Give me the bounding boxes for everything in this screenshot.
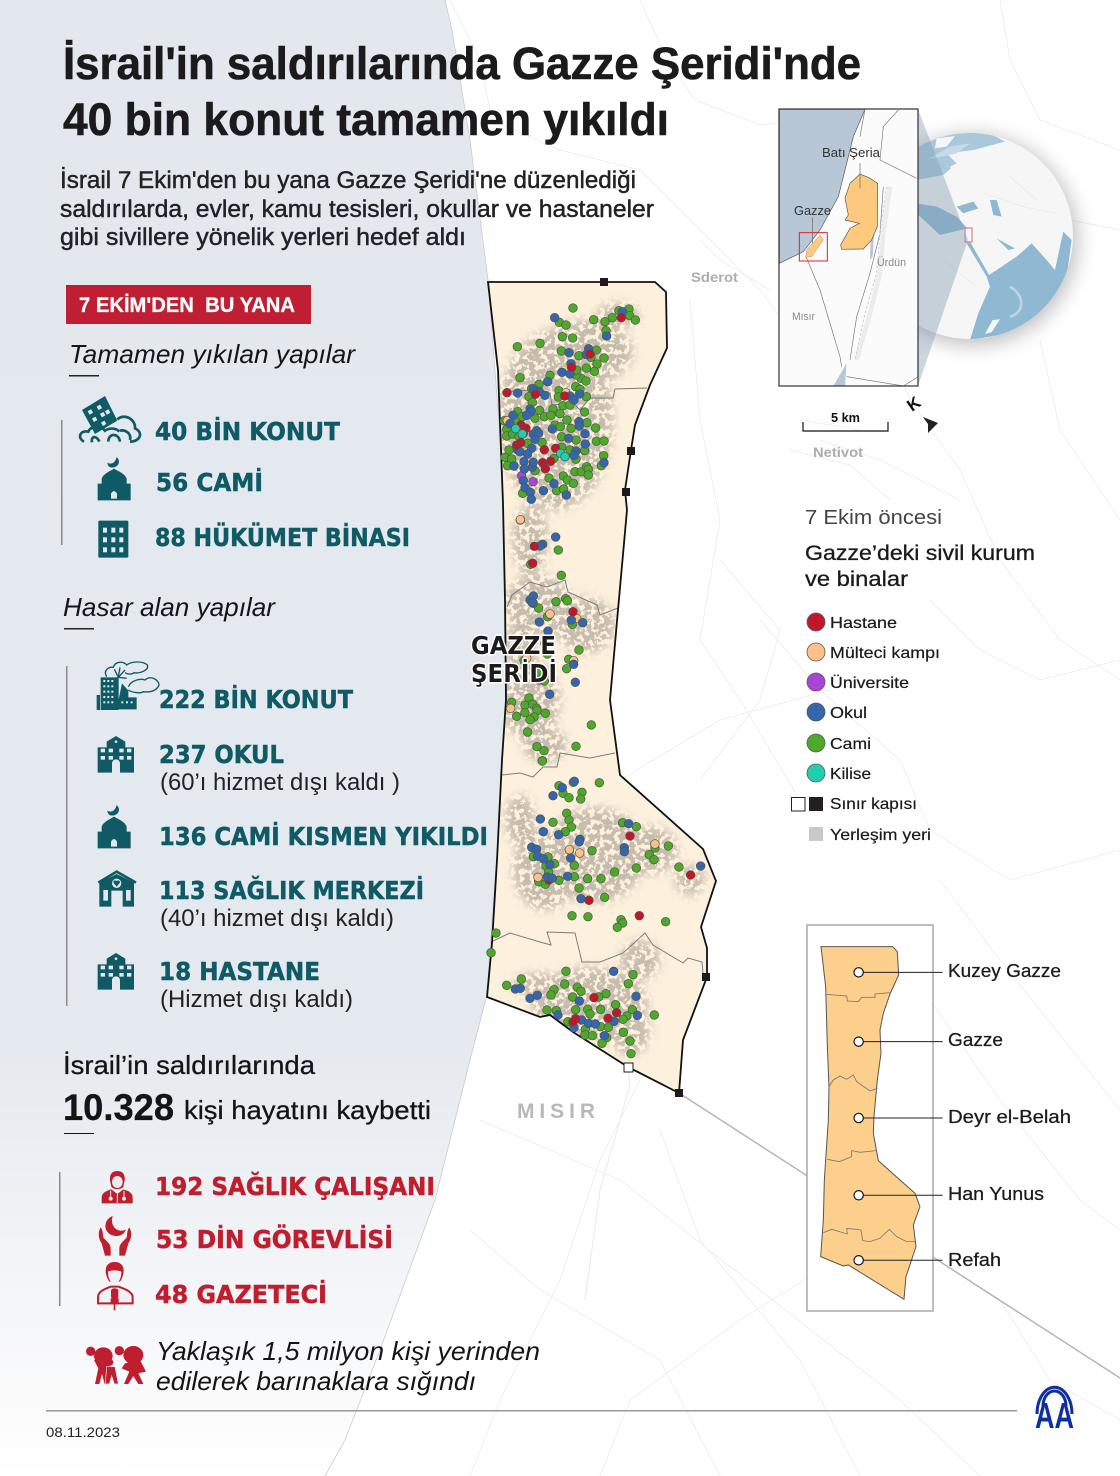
- settlements: [497, 303, 705, 1055]
- legend heading: ve binalar: [805, 568, 908, 591]
- left panel background: [0, 0, 510, 1476]
- icon: mosque: [98, 457, 131, 500]
- death toll text: kişi hayatını kaybetti: [184, 1095, 431, 1125]
- label: Gaza Strip: GAZZE: [471, 631, 556, 660]
- label: Egypt: MISIR: [517, 1100, 595, 1123]
- stat: 237 schools: 237 OKUL: [159, 740, 284, 769]
- legend labels: [830, 615, 940, 844]
- heading: damaged structures: Hasar alan yapılar: [63, 592, 276, 622]
- legend heading: 7 Ekim öncesi: [805, 507, 942, 529]
- scale bar: [803, 410, 888, 431]
- border crossings: [600, 278, 710, 1097]
- red banner: since 7 October: [66, 285, 311, 324]
- icon: collapsing building: [80, 396, 140, 442]
- gaza land: [487, 282, 716, 1093]
- legend labels: Mülteci kampı: [830, 645, 940, 662]
- locator rectangle: [799, 233, 827, 261]
- stat: 237 schools: (60’ı hizmet dışı kaldı ): [160, 769, 400, 796]
- zoom cone: [918, 109, 968, 386]
- land detail: [806, 109, 918, 386]
- stat: 222 thousand homes: 222 BİN KONUT: [159, 684, 353, 714]
- icon: health centre: [98, 872, 136, 907]
- legend labels: Sınır kapısı: [830, 796, 917, 813]
- icon: crescent in hands: [99, 1216, 131, 1256]
- globe: [918, 124, 1088, 356]
- gaza outline: [487, 282, 716, 1093]
- death toll text: [63, 1050, 431, 1134]
- district boundaries: [491, 388, 703, 973]
- stat: 237 schools: [159, 740, 400, 796]
- displacement note: [156, 1336, 540, 1396]
- icon: health worker: [102, 1171, 133, 1203]
- inset labels: Batı Şeria: [822, 145, 881, 160]
- Egypt border line: [679, 1093, 1120, 1378]
- stat: 88 government buildings: 88 HÜKÜMET BİNASI: [155, 522, 410, 552]
- stat: 192 health workers: 192 SAĞLIK ÇALIŞANI: [155, 1171, 435, 1201]
- legend labels: Hastane: [830, 615, 897, 632]
- west bank: [841, 174, 878, 249]
- sea: [779, 109, 865, 263]
- stat: 56 mosques: 56 CAMİ: [156, 467, 263, 497]
- stat: 18 hospitals: (Hizmet dışı kaldı): [160, 986, 353, 1013]
- logo: AA: [1035, 1387, 1074, 1436]
- legend: [792, 507, 1035, 844]
- death toll text: 10.328: [63, 1087, 174, 1128]
- district shape: [821, 947, 920, 1299]
- icon: mosque damaged: [98, 805, 131, 848]
- icon: hospital: [98, 953, 134, 990]
- globe marker: [965, 228, 972, 242]
- facility dots: central gaza: [506, 515, 596, 765]
- date: 08.11.2023: [46, 1424, 120, 1440]
- dead sea and red sea: [833, 227, 874, 386]
- inset location map: Ürdün: [877, 257, 906, 269]
- district inset map: [807, 925, 1071, 1311]
- coastline: [325, 0, 510, 1476]
- stat: 113 health centres: (40’ı hizmet dışı kaldı): [160, 905, 394, 932]
- stat: 18 hospitals: [159, 957, 353, 1013]
- facility dots: north gaza: [500, 304, 640, 524]
- title: İsrail'in saldırılarında Gazze Şeridi'nde: [63, 38, 861, 89]
- globe oceans: [917, 132, 1072, 340]
- globe shadow: [868, 136, 1076, 344]
- gaza: [806, 235, 823, 257]
- label: Sderot: Sderot: [691, 269, 738, 285]
- district labels: Gazze: [948, 1030, 1003, 1050]
- gaza strip map: [487, 282, 716, 1093]
- icon: journalist: [98, 1262, 133, 1310]
- stat: 53 religious officials: 53 DİN GÖREVLİSİ: [156, 1224, 393, 1254]
- displacement note: Yaklaşık 1,5 milyon kişi yerinden: [156, 1336, 540, 1366]
- red banner: since 7 October: 7 EKİM'DEN BU YANA: [79, 294, 295, 317]
- scale bar: 5 km: [831, 410, 860, 425]
- stat: 18 hospitals: 18 HASTANE: [159, 957, 320, 986]
- stat: 48 journalists: 48 GAZETECİ: [155, 1279, 327, 1309]
- district labels: Deyr el-Belah: [948, 1107, 1071, 1127]
- district labels: Han Yunus: [948, 1184, 1044, 1204]
- district labels: Refah: [948, 1250, 1001, 1270]
- displacement note: edilerek barınaklara sığındı: [156, 1366, 476, 1396]
- legend heading: [805, 507, 1035, 591]
- legend labels: Yerleşim yeri: [830, 827, 931, 844]
- inset location map: Mısır: [792, 311, 815, 323]
- label: Netivot: Netivot: [813, 444, 863, 460]
- north arrow: K: [903, 392, 925, 415]
- footer rule: [46, 1410, 1017, 1412]
- stat: 136 mosques partly destroyed: 136 CAMİ KISMEN YIKILDI: [159, 821, 488, 851]
- facility dots: south gaza: [487, 757, 705, 1058]
- north arrow: [903, 392, 938, 433]
- label: Gaza Strip: [471, 631, 557, 688]
- icon: government building: [98, 521, 128, 558]
- intro text: gibi sivillere yönelik yerleri hedef aldı: [60, 224, 466, 251]
- death toll text: İsrail’in saldırılarında: [63, 1050, 316, 1080]
- legend labels: Üniversite: [830, 674, 909, 692]
- icon: displaced family: [86, 1346, 146, 1384]
- intro text: saldırılarda, evler, kamu tesisleri, okullar ve hastaneler: [60, 196, 654, 223]
- inset location map: [779, 109, 918, 386]
- icon: school: [98, 736, 134, 773]
- label: Gaza Strip: ŞERİDİ: [471, 658, 557, 688]
- legend labels: Kilise: [830, 766, 871, 783]
- stat: 113 health centres: [159, 875, 424, 932]
- Egypt road near border: [585, 1067, 630, 1300]
- legend heading: Gazze’deki sivil kurum: [805, 542, 1035, 565]
- stat: 113 health centres: 113 SAĞLIK MERKEZİ: [159, 875, 424, 905]
- intro text: İsrail 7 Ekim'den bu yana Gazze Şeridi'ne düzenlediği: [60, 167, 636, 194]
- title: [63, 38, 861, 145]
- inset labels: [794, 145, 881, 218]
- legend labels: Cami: [830, 736, 871, 753]
- legend items: [792, 613, 825, 841]
- logo: AA: AA: [1035, 1395, 1074, 1436]
- district markers: [854, 968, 863, 1265]
- district lines: [823, 993, 915, 1242]
- intro text: [60, 167, 654, 251]
- stat: 40 thousand homes: 40 BİN KONUT: [155, 416, 340, 446]
- district labels: [948, 961, 1071, 1270]
- icon: damaged buildings with smoke: [97, 662, 159, 710]
- leader lines: [859, 972, 943, 1260]
- legend labels: Okul: [830, 705, 867, 722]
- district labels: Kuzey Gazze: [948, 961, 1061, 981]
- heading: completely destroyed structures: Tamamen yıkılan yapılar: [69, 339, 356, 369]
- inset labels: Gazze: [794, 203, 831, 218]
- background road map: [450, 0, 1120, 1476]
- title: 40 bin konut tamamen yıkıldı: [63, 94, 669, 145]
